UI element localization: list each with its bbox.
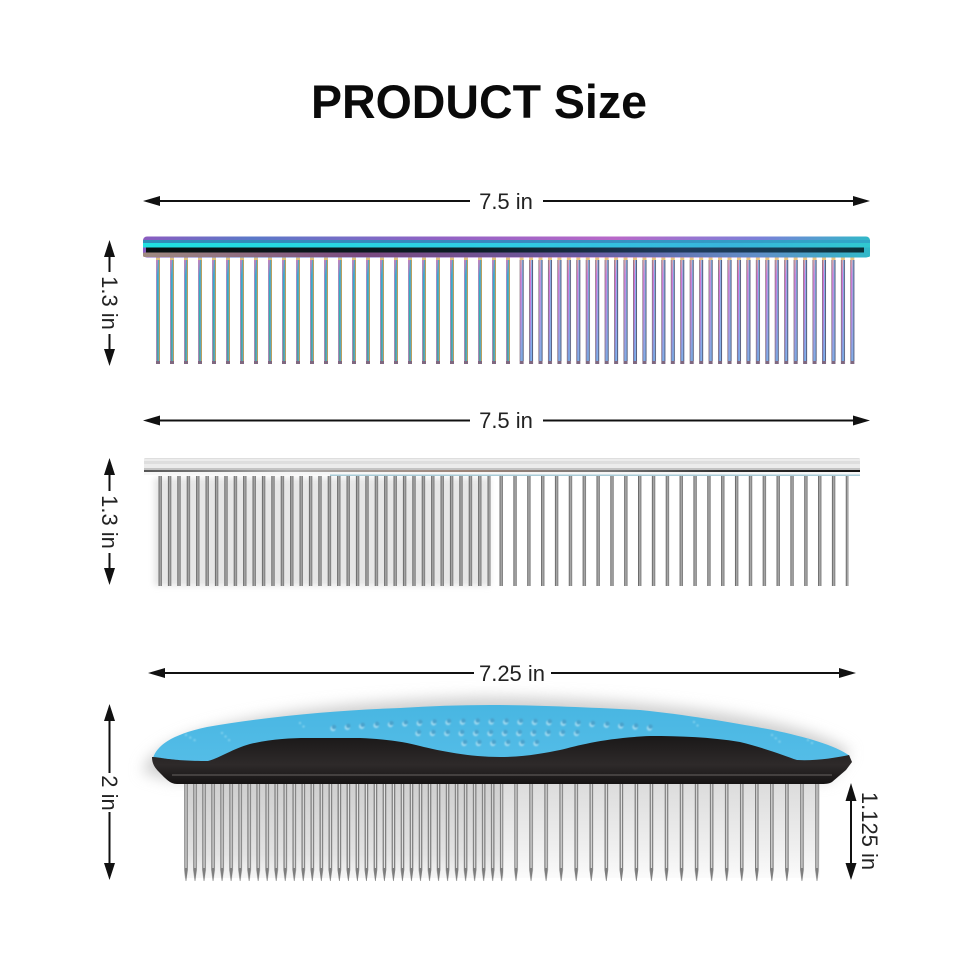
height arrow: handled comb teeth 1.125 in: 1.125 in [857, 792, 882, 870]
handled comb teeth shade [184, 784, 820, 878]
width arrow: silver comb 7.5 in: 7.5 in [479, 408, 533, 433]
width arrow: rainbow comb 7.5 in [143, 189, 870, 214]
silver comb bar [144, 458, 860, 476]
width arrow: handled comb 7.25 in: 7.25 in [479, 661, 545, 686]
rainbow comb [143, 236, 870, 364]
height arrow: rainbow comb 1.3 in: 1.3 in [97, 276, 122, 330]
height arrow: silver comb 1.3 in [97, 458, 122, 585]
height arrow: silver comb 1.3 in: 1.3 in [97, 495, 122, 549]
handled comb base highlight [172, 774, 832, 776]
width arrow: rainbow comb 7.5 in: 7.5 in [479, 189, 533, 214]
handled comb blue grip [153, 705, 850, 772]
title: PRODUCT Size [311, 75, 647, 128]
handled comb [143, 697, 852, 882]
handled comb grip stars [186, 722, 816, 746]
silver comb [144, 458, 860, 586]
silver comb shadow [154, 478, 490, 586]
height arrow: handled comb teeth 1.125 in [846, 783, 882, 880]
handled comb grip dots [333, 720, 656, 744]
height arrow: handled comb 2 in [97, 704, 122, 880]
width arrow: handled comb 7.25 in [148, 661, 856, 686]
width arrow: silver comb 7.5 in [143, 408, 870, 433]
rainbow comb teeth [156, 257, 856, 364]
rainbow comb bar [143, 236, 870, 258]
handled comb black base [152, 736, 852, 784]
height arrow: rainbow comb 1.3 in [97, 240, 122, 366]
silver comb teeth [158, 476, 848, 586]
handled comb teeth [184, 784, 819, 882]
height arrow: handled comb 2 in: 2 in [97, 775, 122, 811]
handled comb shadow [143, 697, 850, 780]
